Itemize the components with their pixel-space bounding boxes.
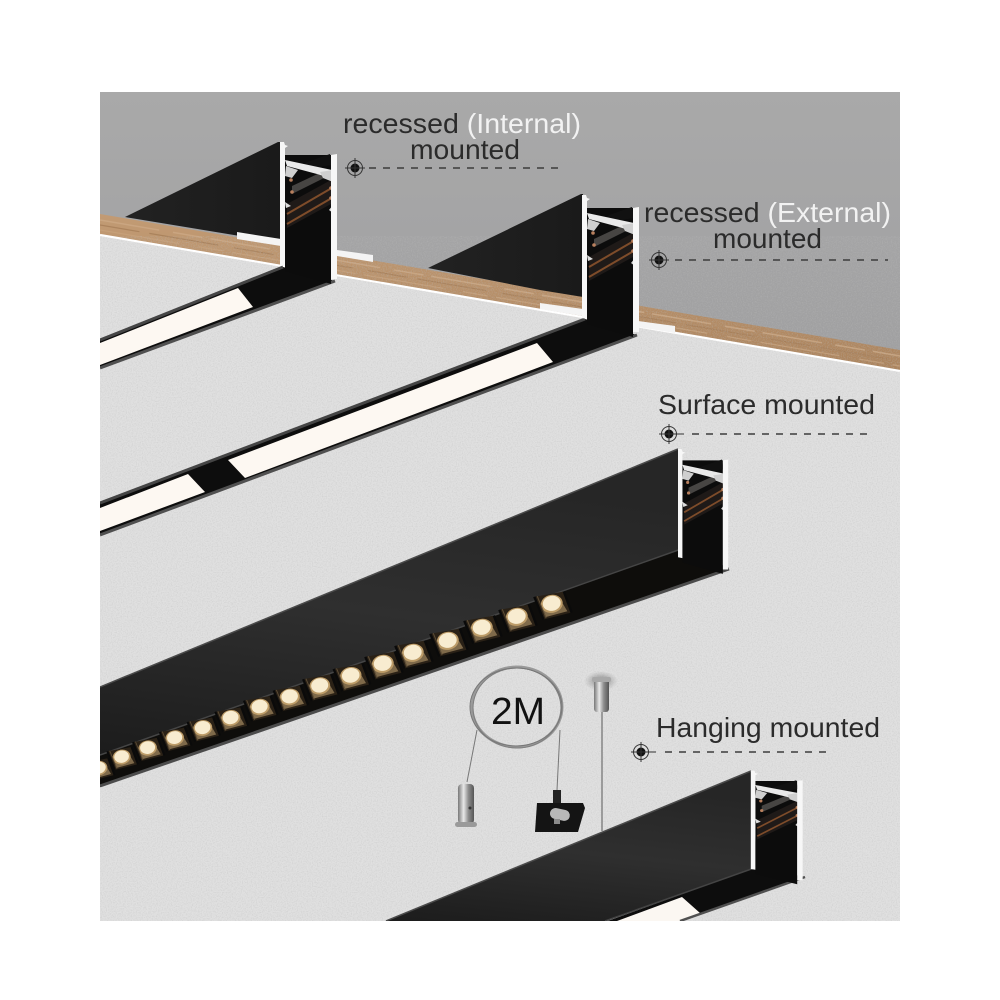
marker line: surface mounted [659, 424, 873, 444]
label: recessed external: mounted [713, 223, 822, 254]
fixture: recessed external [100, 194, 675, 535]
wood ceiling edge [100, 214, 900, 372]
marker line: hanging mounted [631, 742, 830, 762]
label: recessed internal: recessed (Internal) [343, 108, 581, 139]
2M wire kit [455, 667, 585, 832]
label: recessed external [644, 197, 891, 254]
marker line: recessed external [649, 250, 888, 270]
fixture: surface mounted [85, 449, 729, 787]
label: recessed external: recessed (External) [644, 197, 891, 228]
label: recessed internal [343, 108, 581, 165]
label: hanging mounted: Hanging mounted [656, 712, 880, 743]
label: surface mounted: Surface mounted [658, 389, 875, 420]
marker line: recessed internal [345, 158, 562, 178]
fixture: recessed internal [100, 142, 373, 368]
2M label: 2M [491, 691, 545, 733]
photo panel [85, 92, 900, 922]
LED lens row [85, 591, 572, 781]
wire gripper [455, 784, 477, 827]
wall background [100, 92, 900, 382]
hanging wire with ceiling mount [586, 672, 616, 831]
fixture: hanging mounted [386, 771, 805, 922]
label: recessed internal: mounted [410, 134, 520, 165]
track bracket [535, 790, 585, 832]
ceiling surface [100, 235, 900, 921]
infographic: mounting options [100, 92, 900, 921]
